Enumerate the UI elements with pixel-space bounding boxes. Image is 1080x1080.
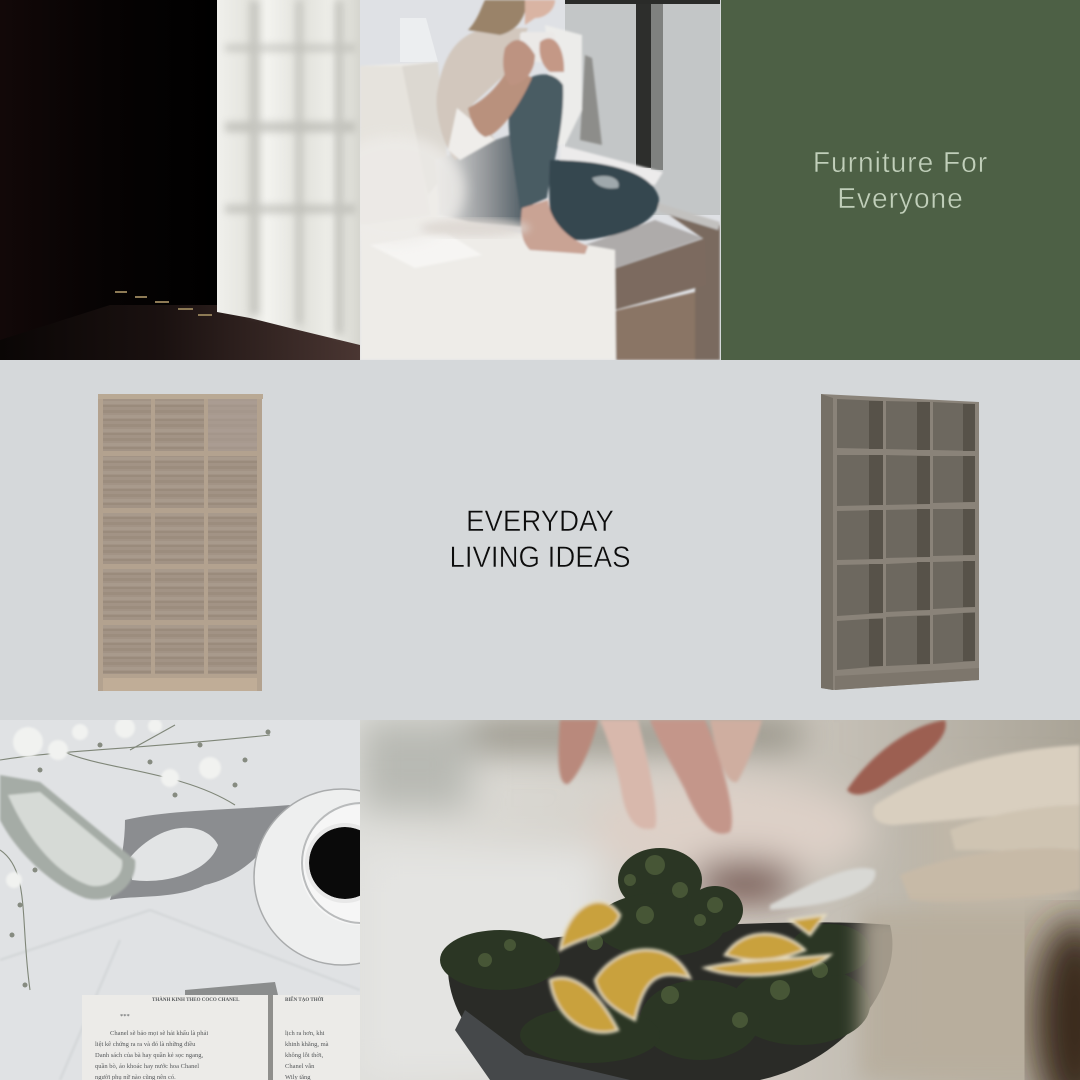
book text: Chanel sẽ bảo mọi sẽ hải khẩu là phải [110,1030,208,1037]
panel: grey product band [0,360,1080,720]
jeans shin [509,74,563,210]
skillet [448,922,892,1080]
book text: khinh khăng, mà [285,1041,329,1048]
picture frame on wall [400,18,438,62]
shadow [110,805,290,900]
photo: hands garnishing a skillet of greens and lemon [360,720,1080,1080]
open book [185,982,278,998]
photo: woman on sofa with mug [360,0,720,360]
heading: Everyday Living Ideas: LIVING IDEAS [449,541,630,574]
snowy window [565,0,720,215]
sofa arm and base [655,205,720,360]
panel: green title block [721,0,1080,360]
heading: Everyday Living Ideas: EVERYDAY [466,505,614,538]
flower sprigs [0,725,270,990]
heading: Furniture For Everyone [813,147,988,215]
hair and face [468,0,528,35]
book text: Danh sách của bà hay quần kẻ sọc ngang, [95,1052,203,1059]
spoon [770,868,875,910]
heading: Furniture For Everyone: Furniture For [813,147,988,179]
foreground blur [860,910,1080,1080]
bookshelf: dark grey oak [821,394,979,690]
bookshelf: light oak [98,394,263,691]
heading: Furniture For Everyone: Everyone [837,183,964,215]
heading: Everyday Living Ideas [449,505,630,574]
hands [559,720,1080,902]
throw [360,62,616,360]
body dark fading [435,130,535,228]
book text: BIẾN TẠO THỜI [285,997,323,1003]
shirt left [436,28,528,160]
book text: Chanel vẫn [285,1063,315,1070]
book text: THÀNH KINH THEO COCO CHANEL [152,997,240,1003]
book text: lịch ra hơn, khi [285,1030,325,1037]
saucer and cup [254,789,430,965]
arm [468,65,532,137]
foot [521,200,588,254]
white fade [325,135,465,245]
mug and hands [520,32,555,62]
lemon slices [550,902,830,1033]
photo: dark room with curtain [0,0,360,360]
book text: *** [120,1013,130,1020]
book text [95,997,329,1080]
book text: liệt kê chứng ra ra và đó là những điều [95,1041,196,1048]
glass vase [0,775,135,899]
grey back cushion and white cushion [580,55,602,145]
jeans thigh [549,160,659,240]
greens [440,848,870,1063]
white shirt right side [545,25,582,145]
book text: không lỗi thời, [285,1052,324,1059]
photo: coffee, vase and open book on tablecloth [0,720,360,1080]
book text: quần bò, áo khoác hay nước hoa Chanel [95,1063,199,1070]
